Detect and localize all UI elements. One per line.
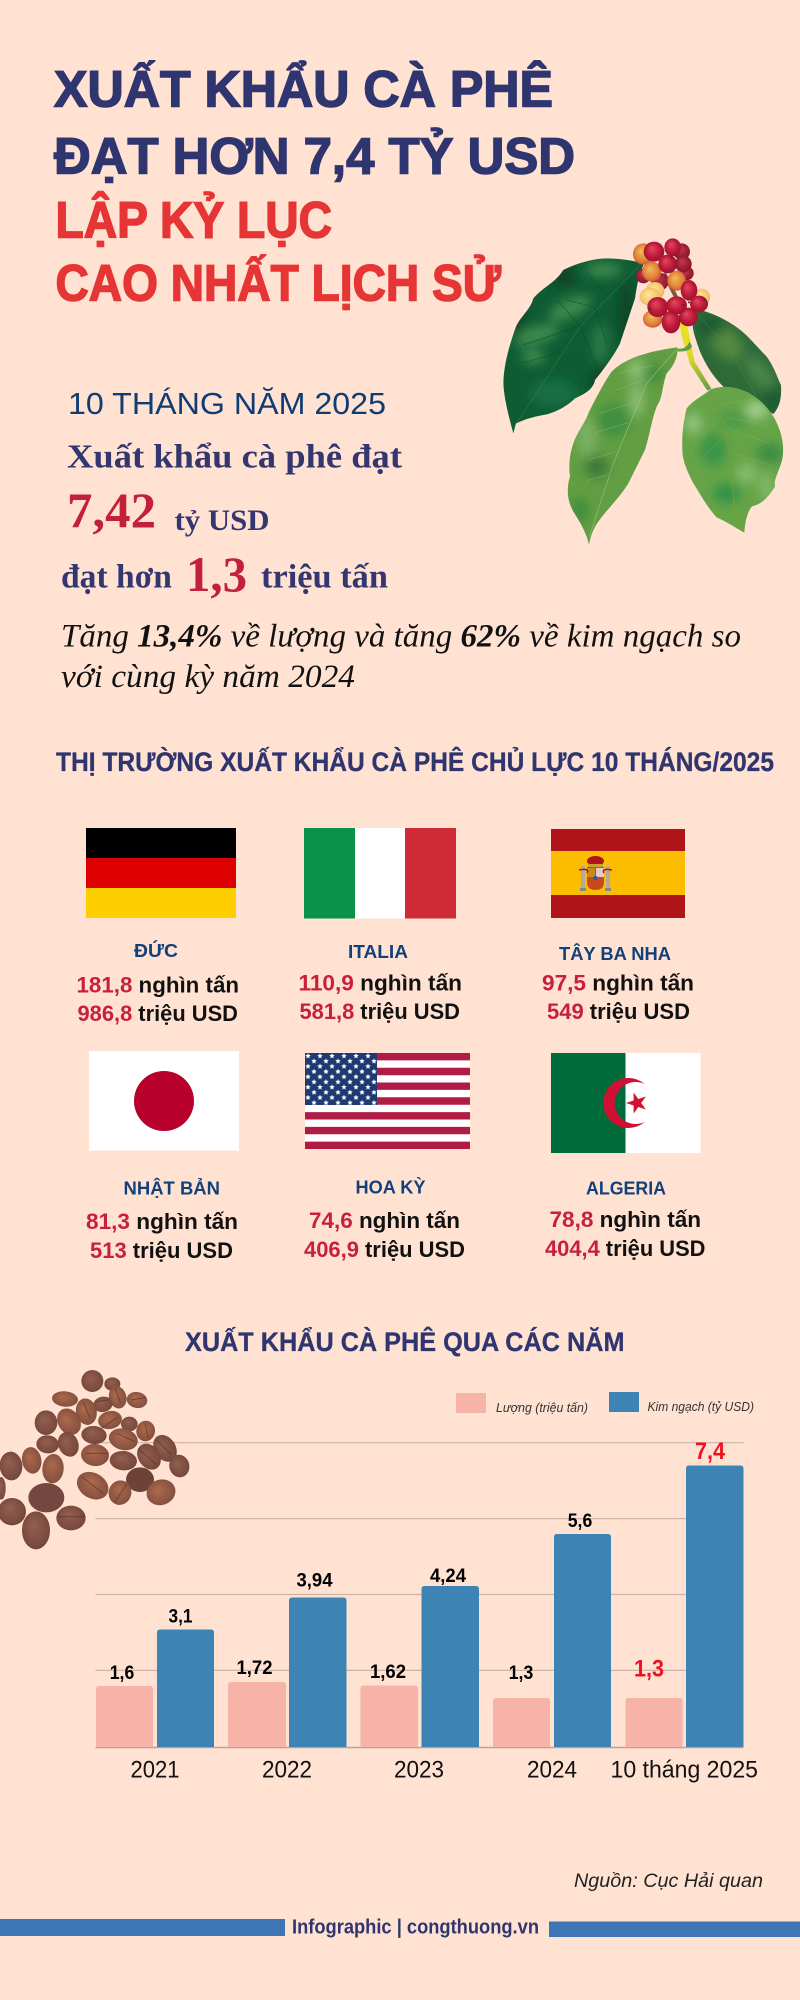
market: Spain: 97,5 nghìn tấn: [542, 970, 694, 996]
market: Italy: ITALIA: [348, 942, 408, 962]
axis labels: [130, 1756, 758, 1784]
axis labels: 2022: [262, 1756, 312, 1784]
flag: Algeria: [551, 1053, 700, 1153]
leaf: dark left: [503, 258, 644, 434]
source note: Nguồn: Cục Hải quan: [574, 1871, 763, 1892]
market: Italy: 581,8 triệu USD: [300, 999, 460, 1024]
title: ĐẠT HƠN 7,4 TỶ USD: [54, 126, 575, 184]
key figures: [61, 386, 741, 695]
bars: 10 months 2025: 1,3: [634, 1656, 664, 1682]
market: Germany: ĐỨC: [134, 940, 178, 961]
market: Algeria: 78,8 nghìn tấn: [550, 1207, 701, 1232]
period label: 10 THÁNG NĂM 2025: [68, 386, 386, 421]
stem: [679, 316, 711, 391]
market: Germany: 986,8 triệu USD: [78, 1001, 238, 1026]
footer: Infographic | congthuong.vn: [292, 1916, 539, 1938]
title: LẬP KỶ LỤC: [56, 190, 332, 248]
legend: [456, 1392, 754, 1415]
bars: 2024: 5,6: [568, 1511, 592, 1532]
leaf: middle: [568, 348, 678, 545]
legend: Lượng (triệu tấn): [496, 1400, 588, 1415]
footer: [0, 1916, 800, 1938]
market: Japan: 513 triệu USD: [90, 1238, 233, 1263]
market: Algeria: ALGERIA: [586, 1178, 666, 1198]
key figures: triệu tấn: [261, 558, 388, 596]
key figures: với cùng kỳ năm 2024: [61, 659, 355, 695]
illustration: coffee branch: [497, 238, 787, 550]
leaf: right back: [692, 311, 782, 414]
axis labels: 2023: [394, 1756, 444, 1784]
market: USA: 74,6 nghìn tấn: [309, 1208, 460, 1233]
key figures: 7,42: [67, 482, 156, 538]
bars: 2023: 1,62: [370, 1662, 406, 1683]
bars: 10 months 2025: 7,4: [695, 1438, 726, 1465]
bars: 2022: 3,94: [296, 1570, 333, 1592]
grid: [96, 1443, 744, 1670]
market: Algeria: [545, 1053, 706, 1261]
flag: Japan: [89, 1051, 239, 1150]
title: XUẤT KHẨU CÀ PHÊ: [54, 60, 553, 118]
flag: Germany: [86, 828, 236, 918]
export value: Xuất khẩu cà phê đạt: [67, 438, 403, 476]
leaf: right front: [682, 386, 784, 532]
market: Germany: 181,8 nghìn tấn: [76, 972, 239, 998]
bars: 2021: 1,6: [110, 1663, 134, 1684]
branch twig: [677, 342, 692, 351]
market: Germany: [76, 828, 239, 1026]
export volume: đạt hơn: [61, 558, 172, 596]
market: Italy: [298, 828, 462, 1024]
market: Japan: NHẬT BẢN: [124, 1178, 220, 1198]
market: Spain: [542, 829, 694, 1024]
bars: 2024: [493, 1511, 611, 1747]
bars: 2024: 1,3: [509, 1663, 533, 1684]
flag: Spain: [551, 829, 685, 918]
heading: exports by year: XUẤT KHẨU CÀ PHÊ QUA CÁC NĂM: [185, 1326, 624, 1357]
market: Algeria: 404,4 triệu USD: [545, 1236, 706, 1261]
axis labels: 10 tháng 2025: [610, 1756, 758, 1784]
bars: 2021: 3,1: [168, 1606, 193, 1628]
market: USA: [304, 1053, 470, 1262]
bars: 10 months 2025: [626, 1438, 744, 1747]
bars: 2023: 4,24: [430, 1566, 466, 1587]
bars: 2023: [360, 1566, 479, 1747]
legend: Kim ngạch (tỷ USD): [648, 1399, 754, 1414]
bars: 2021: [96, 1606, 214, 1747]
flag: USA: [305, 1053, 470, 1149]
bar chart: [96, 1392, 758, 1784]
coffee berries: [633, 238, 710, 333]
growth note: Tăng 13,4% về lượng và tăng 62% về kim ngạch so: [61, 618, 741, 654]
illustration: coffee beans: [0, 1370, 192, 1549]
market: USA: 406,9 triệu USD: [304, 1237, 465, 1262]
title: [54, 60, 575, 312]
market: Italy: 110,9 nghìn tấn: [298, 970, 462, 996]
flag: Italy: [304, 828, 456, 918]
key figures: 1,3: [186, 546, 247, 602]
market: Spain: TÂY BA NHA: [559, 943, 671, 964]
market: USA: HOA KỲ: [356, 1176, 426, 1198]
key figures: tỷ USD: [174, 504, 270, 537]
axis labels: 2021: [130, 1756, 180, 1784]
bars: 2022: 1,72: [236, 1658, 272, 1679]
emblem: [579, 856, 612, 891]
market: Japan: 81,3 nghìn tấn: [86, 1209, 238, 1234]
market: Spain: 549 triệu USD: [547, 999, 690, 1024]
bars: 2022: [228, 1570, 346, 1747]
market: Japan: [86, 1051, 239, 1263]
title: CAO NHẤT LỊCH SỬ: [56, 254, 502, 312]
axis labels: 2024: [527, 1756, 577, 1784]
